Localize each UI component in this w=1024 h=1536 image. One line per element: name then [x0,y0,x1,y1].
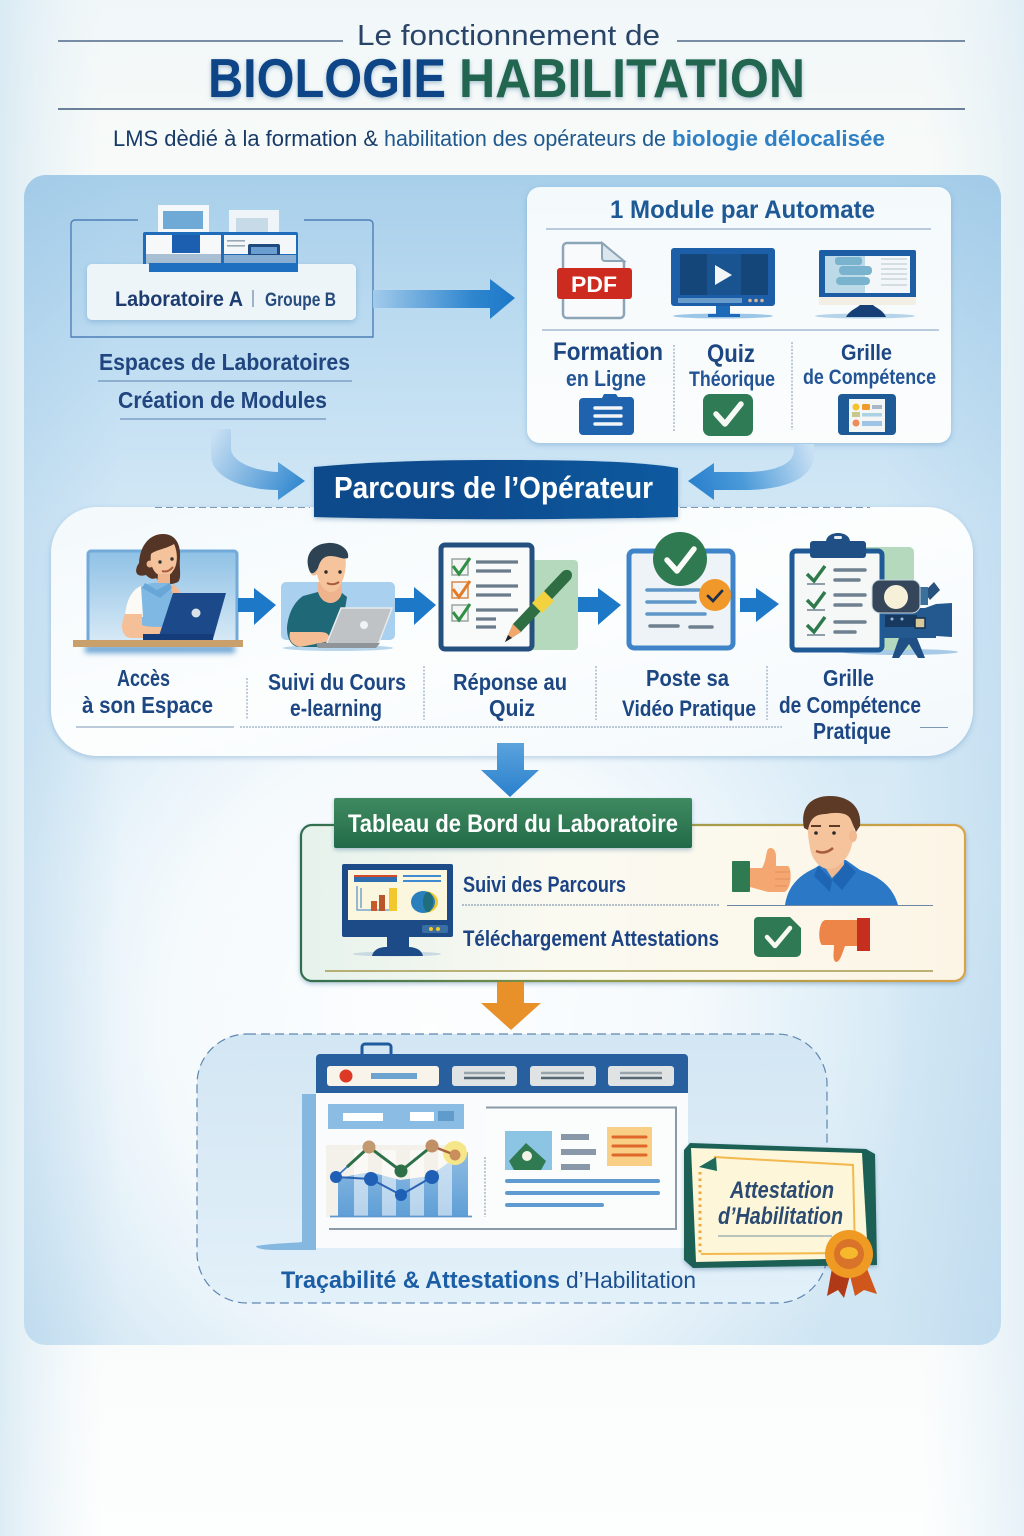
label: Vidéo Pratique [622,696,756,721]
labels and icons row: Grille [841,340,892,365]
label: e-learning [290,695,382,721]
label: Accès [117,665,170,691]
panel: traçabilité [197,1034,877,1303]
label: Réponse au [453,669,567,695]
illustration: dashboard window [256,1044,688,1250]
icon: competence grid [838,394,896,435]
banner: parcours de l'opérateur: Parcours de l’Opérateur [334,470,653,505]
title block: BIOLOGIE [208,47,446,109]
labels and icons row: de Compétence [803,366,936,389]
label card: laboratoire and groupe: Groupe B [265,289,336,311]
labels and icons row: Quiz [707,340,755,368]
title block: Le fonctionnement de [357,20,660,52]
label [82,665,213,718]
labels and icons row: en Ligne [566,366,646,391]
text: rows: Suivi des Parcours [463,872,626,897]
label card: laboratoire and groupe: Laboratoire A [115,287,243,311]
label card: laboratoire and groupe [87,263,356,320]
panel: parcours de l'opérateur [51,507,973,756]
title block: HABILITATION [459,47,805,109]
labels and icons row: Théorique [689,368,775,391]
inner content card [329,1107,676,1229]
arrow: step 1 to 2 [238,588,276,625]
label [268,669,406,721]
icon: check badge [754,917,801,957]
title block [58,20,965,151]
label: de Compétence [779,692,921,718]
arrow: down to traceability [481,982,541,1030]
label: Quiz [489,695,535,721]
illustration: woman with laptop [73,534,243,653]
caption [281,1267,696,1294]
title block: habilitation des opérateurs de [384,126,666,151]
caption: d’Habilitation [566,1267,696,1293]
label: à son Espace [82,692,213,718]
arrow: curved right to parcours [688,444,814,500]
labels and icons row: Formation [553,338,663,366]
line chart [326,1140,472,1217]
label [622,665,756,721]
arrow: step 4 to 5 [740,588,779,622]
text: espaces and modules: Espaces de Laboratoires [99,349,350,375]
step 5: grille de compétence pratique [779,533,958,744]
step 4: poste sa vidéo pratique [622,532,756,721]
illustration: clipboard and camera [792,533,958,658]
step 2: suivi du cours [268,543,406,721]
label [779,665,921,744]
step 3: réponse au quiz [441,545,578,721]
illustration: certificate: d’Habilitation [718,1203,843,1230]
label: Pratique [813,718,891,744]
icon: man [785,796,898,905]
title block: biologie délocalisée [672,126,885,151]
illustration: man with laptop [281,543,395,651]
arrow: down to dashboard [481,743,539,797]
label: Poste sa [646,665,729,691]
caption: Traçabilité & Attestations [281,1267,560,1294]
icon: video monitor [671,248,775,318]
arrow: labs to module [373,279,515,319]
arrow: step 2 to 3 [395,587,436,625]
labels and icons row [553,338,936,436]
icon: lab automates [143,205,298,268]
icon: thumb up [732,848,791,892]
icon: dashboard monitor [342,864,453,956]
illustration: certificate [684,1143,877,1298]
text: rows: Téléchargement Attestations [463,926,719,951]
label: Grille [823,665,874,691]
step 1: accès à son espace [73,534,243,718]
icon: thumb down [819,918,870,962]
arrow: step 3 to 4 [578,588,621,625]
illustration: quiz sheet and pencil [441,545,578,650]
icon: green check [703,394,753,436]
text: espaces and modules [98,349,352,419]
icon: blue list [579,394,634,435]
heading: module: 1 Module par Automate [610,196,875,224]
main panel background [24,175,1001,1345]
label [453,669,567,721]
banner: parcours de l'opérateur [314,460,678,519]
icon: competence monitor [815,250,916,318]
text: espaces and modules: Création de Modules [118,387,327,413]
label: Suivi du Cours [268,669,406,695]
illustration: validated document [629,532,733,648]
icon: pdf [557,243,632,318]
heading tab: Tableau de Bord du Laboratoire [348,810,678,838]
illustration: certificate: Attestation [729,1177,834,1204]
arrow: curved left to parcours [211,429,305,500]
panel: laboratory spaces [71,205,373,337]
heading tab [334,798,692,848]
icon: pdf: PDF [571,272,617,297]
panel: module par automate [527,187,951,443]
panel: tableau de bord [301,796,965,981]
text: rows [325,872,933,971]
title block: LMS dèdié à la formation & [113,126,378,151]
